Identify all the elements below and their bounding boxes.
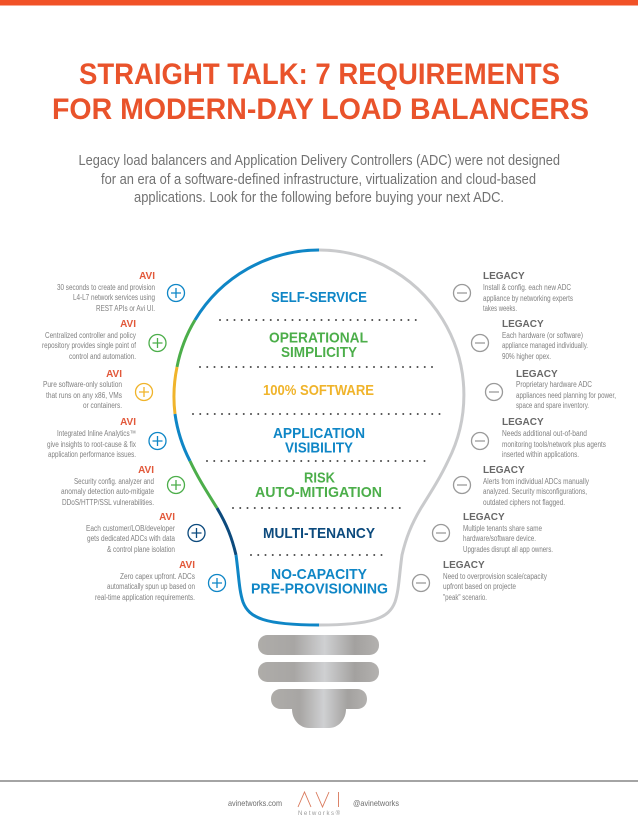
legacy text 3: space and spare inventory. bbox=[516, 401, 589, 410]
icon: plus 7 bbox=[208, 574, 226, 592]
legacy text 7: "peak" scenario. bbox=[443, 593, 487, 602]
bulb base bbox=[258, 635, 379, 728]
heading: application visibility: VISIBILITY bbox=[285, 440, 353, 456]
avi text 4 bbox=[47, 417, 136, 459]
avi text 4: Integrated Inline Analytics™ bbox=[57, 429, 136, 438]
icon: plus 1 bbox=[168, 284, 184, 302]
heading: risk auto-mitigation: RISK bbox=[304, 470, 335, 486]
avi text 4: give insights to root-cause & fix bbox=[47, 440, 136, 449]
avi text 3: that runs on any x86, VMs bbox=[46, 391, 122, 400]
legacy text 4: inserted within applications. bbox=[502, 450, 579, 459]
legacy text 5: analyzed. Security misconfigurations, bbox=[483, 487, 587, 496]
title: STRAIGHT TALK: 7 REQUIREMENTS bbox=[79, 58, 560, 91]
icon: plus 2 bbox=[149, 334, 166, 352]
light bulb outline bbox=[174, 250, 464, 625]
legacy text 2: 90% higher opex. bbox=[502, 352, 551, 361]
legacy text 1: Install & config. each new ADC bbox=[483, 283, 571, 292]
heading: no-capacity pre-provisioning: NO-CAPACITY bbox=[271, 566, 367, 583]
legacy text 7: Need to overprovision scale/capacity bbox=[443, 572, 547, 581]
legacy text 7 bbox=[443, 560, 547, 602]
avi text 5 bbox=[61, 465, 154, 507]
avi text 7: Zero capex upfront. ADCs bbox=[120, 572, 195, 581]
avi text 3: Pure software-only solution bbox=[43, 380, 122, 389]
avi text 3: AVI bbox=[106, 369, 122, 380]
avi text 7: automatically spun up based on bbox=[107, 582, 195, 591]
legacy text 6: LEGACY bbox=[463, 512, 505, 523]
avi text 5: DDoS/HTTP/SSL vulnerabilities. bbox=[62, 498, 154, 507]
avi text 3 bbox=[43, 369, 122, 410]
avi text 6: AVI bbox=[159, 512, 175, 523]
legacy text 3: LEGACY bbox=[516, 369, 558, 380]
avi text 1: AVI bbox=[139, 271, 155, 282]
avi text 5: Security config. analyzer and bbox=[74, 477, 154, 486]
avi text 7: AVI bbox=[179, 560, 195, 571]
avi networks logo bbox=[298, 792, 341, 817]
avi text 5: anomaly detection auto-mitigate bbox=[61, 487, 154, 496]
heading: application visibility bbox=[273, 425, 365, 456]
legacy text 6 bbox=[463, 512, 553, 554]
legacy text 6: Multiple tenants share same bbox=[463, 524, 542, 533]
legacy text 6: hardware/software device. bbox=[463, 534, 536, 543]
legacy text 5: outdated ciphers not flagged. bbox=[483, 498, 565, 507]
footer handle: @avinetworks bbox=[353, 798, 399, 808]
legacy text 5: LEGACY bbox=[483, 465, 525, 476]
legacy text 1: appliance by networking experts bbox=[483, 294, 573, 303]
intro text: Legacy load balancers and Application Delivery Controllers (ADC) were not designed bbox=[78, 152, 560, 169]
avi text 5: AVI bbox=[138, 465, 154, 476]
avi text 2 bbox=[42, 319, 137, 361]
heading: risk auto-mitigation: AUTO-MITIGATION bbox=[255, 484, 382, 501]
avi text 1 bbox=[57, 271, 155, 313]
legacy text 2: LEGACY bbox=[502, 319, 544, 330]
icon: plus 4 bbox=[149, 432, 166, 450]
icon: plus 6 bbox=[188, 524, 205, 542]
heading: self-service: SELF-SERVICE bbox=[271, 289, 367, 306]
legacy text 1: LEGACY bbox=[483, 271, 525, 282]
legacy text 2: appliance managed individually. bbox=[502, 341, 588, 350]
legacy text 1: takes weeks. bbox=[483, 304, 517, 313]
avi text 6 bbox=[86, 512, 175, 554]
avi networks logo: Networks® bbox=[298, 810, 341, 817]
heading: operational simplicity: SIMPLICITY bbox=[281, 344, 357, 361]
avi text 2: AVI bbox=[120, 319, 136, 330]
top bar bbox=[0, 0, 638, 6]
icon: minus 1 bbox=[454, 284, 470, 302]
avi text 1: 30 seconds to create and provision bbox=[57, 283, 155, 292]
avi text 7: real-time application requirements. bbox=[95, 593, 195, 602]
legacy text 2 bbox=[502, 319, 588, 361]
legacy text 1 bbox=[483, 271, 573, 313]
heading: operational simplicity: OPERATIONAL bbox=[269, 330, 368, 346]
avi text 1: L4-L7 network services using bbox=[73, 293, 155, 302]
intro text: applications. Look for the following before buying your next ADC. bbox=[134, 189, 504, 206]
avi text 7 bbox=[95, 560, 195, 602]
avi text 6: gets dedicated ADCs with data bbox=[87, 534, 175, 543]
avi text 4: AVI bbox=[120, 417, 136, 428]
heading: 100% software: 100% SOFTWARE bbox=[263, 382, 374, 399]
icon: minus 2 bbox=[472, 334, 488, 352]
legacy text 4 bbox=[502, 417, 606, 459]
heading: risk auto-mitigation bbox=[255, 470, 382, 501]
title bbox=[52, 58, 589, 126]
intro text: for an era of a software-defined infrastructure, virtualization and cloud-based bbox=[101, 171, 536, 188]
dotted dividers bbox=[193, 320, 445, 555]
legacy text 3 bbox=[516, 369, 616, 410]
legacy text 5: Alerts from individual ADCs manually bbox=[483, 477, 589, 486]
avi text 3: or containers. bbox=[83, 401, 122, 410]
heading: application visibility: APPLICATION bbox=[273, 425, 365, 442]
heading: no-capacity pre-provisioning: PRE-PROVISIONING bbox=[251, 580, 388, 598]
intro text bbox=[78, 152, 560, 206]
icon: plus 5 bbox=[168, 476, 184, 494]
avi text 2: control and automation. bbox=[69, 352, 136, 361]
avi text 6: Each customer/LOB/developer bbox=[86, 524, 175, 533]
heading: operational simplicity bbox=[269, 330, 368, 361]
legacy text 4: monitoring tools/network plus agents bbox=[502, 440, 606, 449]
icon: plus 3 bbox=[136, 384, 152, 400]
legacy text 2: Each hardware (or software) bbox=[502, 331, 583, 340]
avi text 4: application performance issues. bbox=[48, 450, 136, 459]
footer website: avinetworks.com bbox=[228, 798, 282, 808]
icon: minus 6 bbox=[432, 524, 450, 542]
legacy text 4: Needs additional out-of-band bbox=[502, 429, 587, 438]
avi text 6: & control plane isolation bbox=[107, 545, 175, 554]
title: FOR MODERN-DAY LOAD BALANCERS bbox=[52, 93, 589, 126]
legacy text 5 bbox=[483, 465, 589, 507]
legacy text 7: LEGACY bbox=[443, 560, 485, 571]
icon: minus 4 bbox=[472, 432, 488, 450]
icon: minus 7 bbox=[412, 574, 430, 592]
icon: minus 5 bbox=[454, 476, 470, 494]
icon: minus 3 bbox=[486, 384, 502, 400]
heading: no-capacity pre-provisioning bbox=[251, 566, 388, 598]
avi text 1: REST APIs or Avi UI. bbox=[96, 304, 155, 313]
legacy text 4: LEGACY bbox=[502, 417, 544, 428]
heading: multi-tenancy: MULTI-TENANCY bbox=[263, 525, 375, 542]
legacy text 3: Proprietary hardware ADC bbox=[516, 380, 592, 389]
avi text 2: Centralized controller and policy bbox=[45, 331, 136, 340]
footer rule bbox=[0, 780, 638, 782]
avi text 2: repository provides single point of bbox=[42, 341, 137, 350]
legacy text 6: Upgrades disrupt all app owners. bbox=[463, 545, 553, 554]
legacy text 7: upfront based on projecte bbox=[443, 582, 516, 591]
